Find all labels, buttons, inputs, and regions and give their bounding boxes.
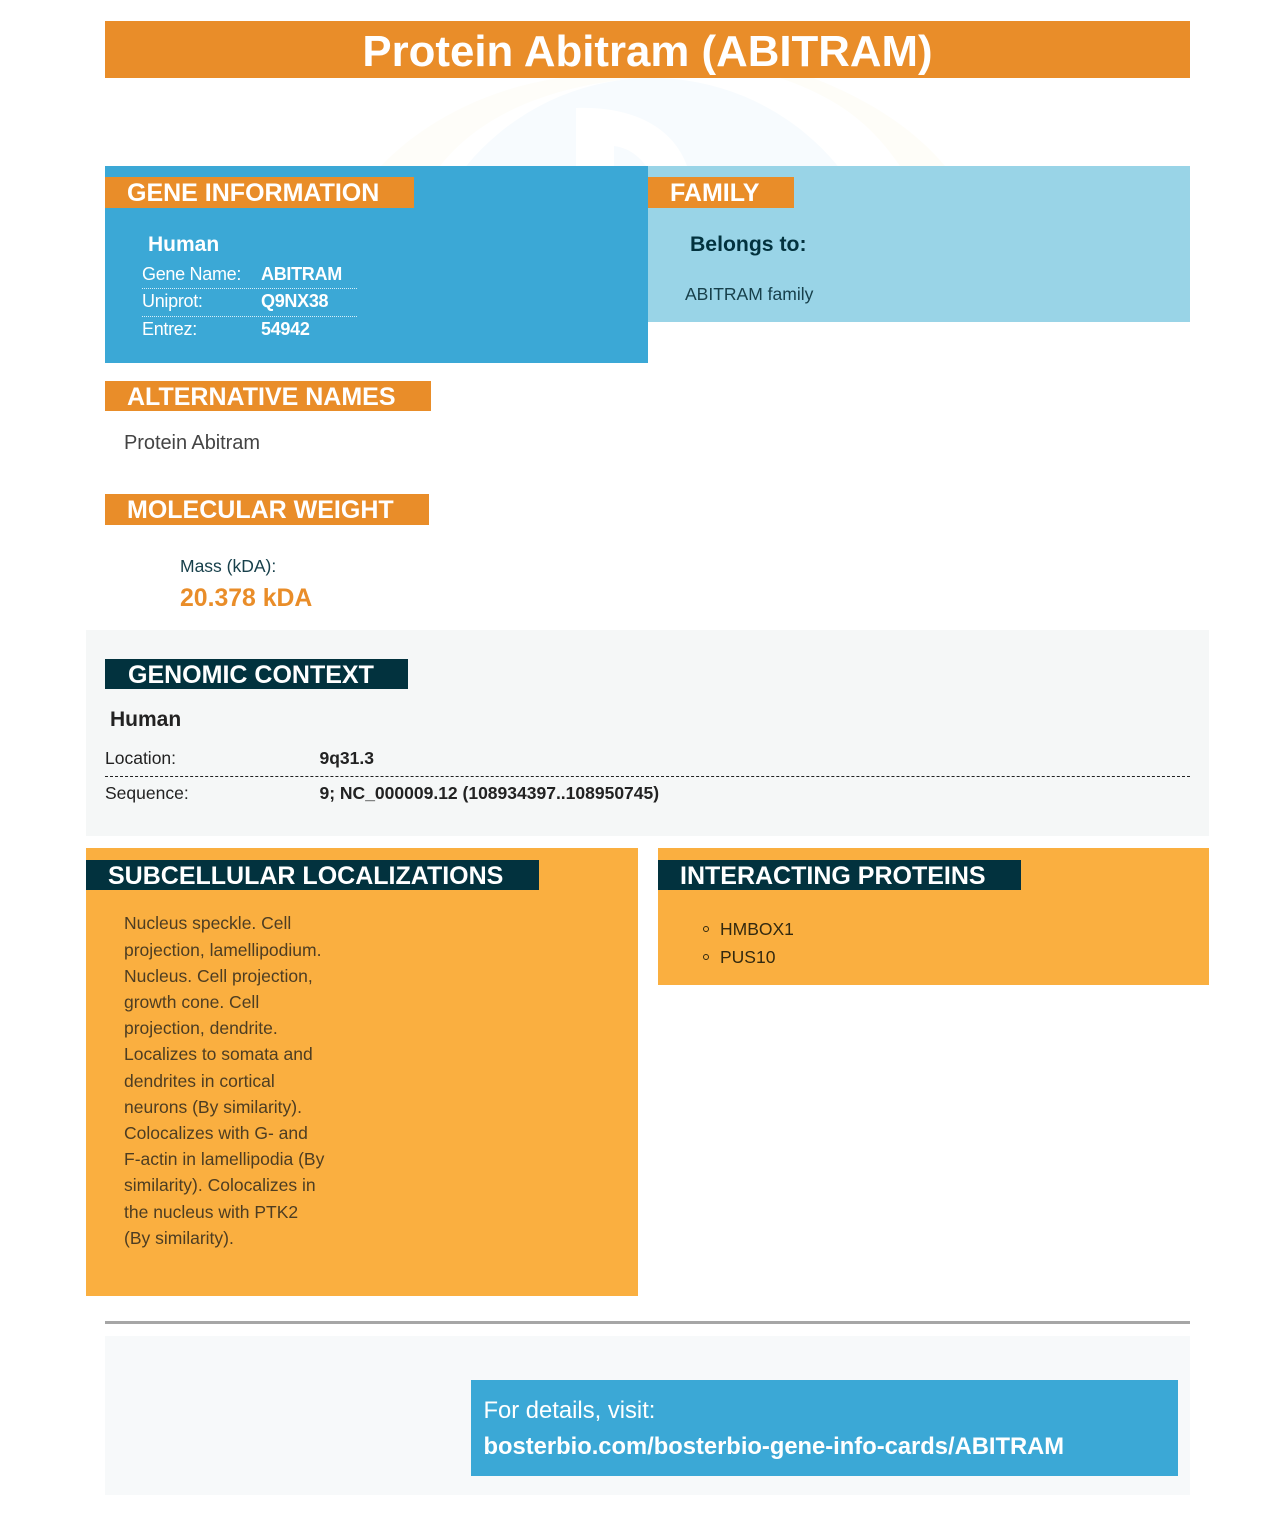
heading: gene information: GENE INFORMATION [127, 179, 379, 207]
mass label: Mass (kDA): [180, 556, 276, 576]
url: bosterbio.com/bosterbio-gene-info-cards/ABITRAM [484, 1433, 1064, 1460]
localization text: the nucleus with PTK2 [124, 1202, 298, 1222]
gene table: Q9NX38 [261, 291, 328, 311]
species label: Human [110, 708, 181, 731]
alternative names text: Protein Abitram [124, 432, 260, 454]
localization text [124, 913, 324, 1248]
gene table: Entrez: [142, 319, 197, 339]
mass value: 20.378 kDA [180, 585, 312, 612]
protein list [703, 919, 794, 967]
heading: alternative names: ALTERNATIVE NAMES [127, 383, 396, 411]
panel: family [648, 166, 1190, 322]
species label: Human [148, 233, 219, 256]
belongs to label: Belongs to: [690, 233, 807, 256]
protein list: HMBOX1 [720, 919, 794, 939]
heading: molecular weight: MOLECULAR WEIGHT [127, 496, 394, 524]
heading: genomic context: GENOMIC CONTEXT [128, 661, 374, 689]
localization text: neurons (By similarity). [124, 1097, 302, 1117]
localization text: Localizes to somata and [124, 1044, 313, 1064]
location row: 9q31.3 [320, 748, 374, 768]
localization text: projection, dendrite. [124, 1018, 278, 1038]
localization text: Nucleus speckle. Cell [124, 913, 291, 933]
localization text: F-actin in lamellipodia (By [124, 1149, 324, 1169]
protein list: PUS10 [720, 947, 775, 967]
heading: family: FAMILY [670, 179, 759, 207]
heading: family [648, 177, 794, 208]
localization text: growth cone. Cell [124, 992, 259, 1012]
localization text: similarity). Colocalizes in [124, 1175, 316, 1195]
gene table: Gene Name: [142, 264, 241, 284]
sequence row: 9; NC_000009.12 (108934397..108950745) [320, 783, 659, 803]
heading: subcellular localizations: SUBCELLULAR LOCALIZATIONS [108, 862, 503, 890]
localization text: Colocalizes with G- and [124, 1123, 308, 1143]
localization text: projection, lamellipodium. [124, 940, 321, 960]
gene table: 54942 [261, 319, 310, 339]
callout: details link [471, 1380, 1178, 1476]
panel: subcellular localizations [86, 848, 638, 1296]
location row: Location: [105, 748, 176, 768]
gene table: Uniprot: [142, 291, 203, 311]
gene table: ABITRAM [261, 264, 342, 284]
panel: genomic context [86, 630, 1209, 836]
localization text: (By similarity). [124, 1228, 234, 1248]
sequence row [105, 783, 659, 803]
title: Protein Abitram (ABITRAM) [362, 27, 933, 76]
title [105, 21, 1190, 78]
visit label: For details, visit: [484, 1397, 655, 1424]
sequence row: Sequence: [105, 783, 189, 803]
panel: gene information [105, 166, 648, 363]
localization text: dendrites in cortical [124, 1071, 275, 1091]
localization text: Nucleus. Cell projection, [124, 966, 313, 986]
panel: interacting proteins [658, 848, 1209, 985]
heading: interacting proteins: INTERACTING PROTEINS [680, 862, 986, 890]
family value: ABITRAM family [685, 284, 813, 304]
location row [105, 747, 1190, 777]
panel: footer [105, 1336, 1190, 1495]
watermark logo [370, 78, 960, 166]
gene table [142, 264, 357, 339]
